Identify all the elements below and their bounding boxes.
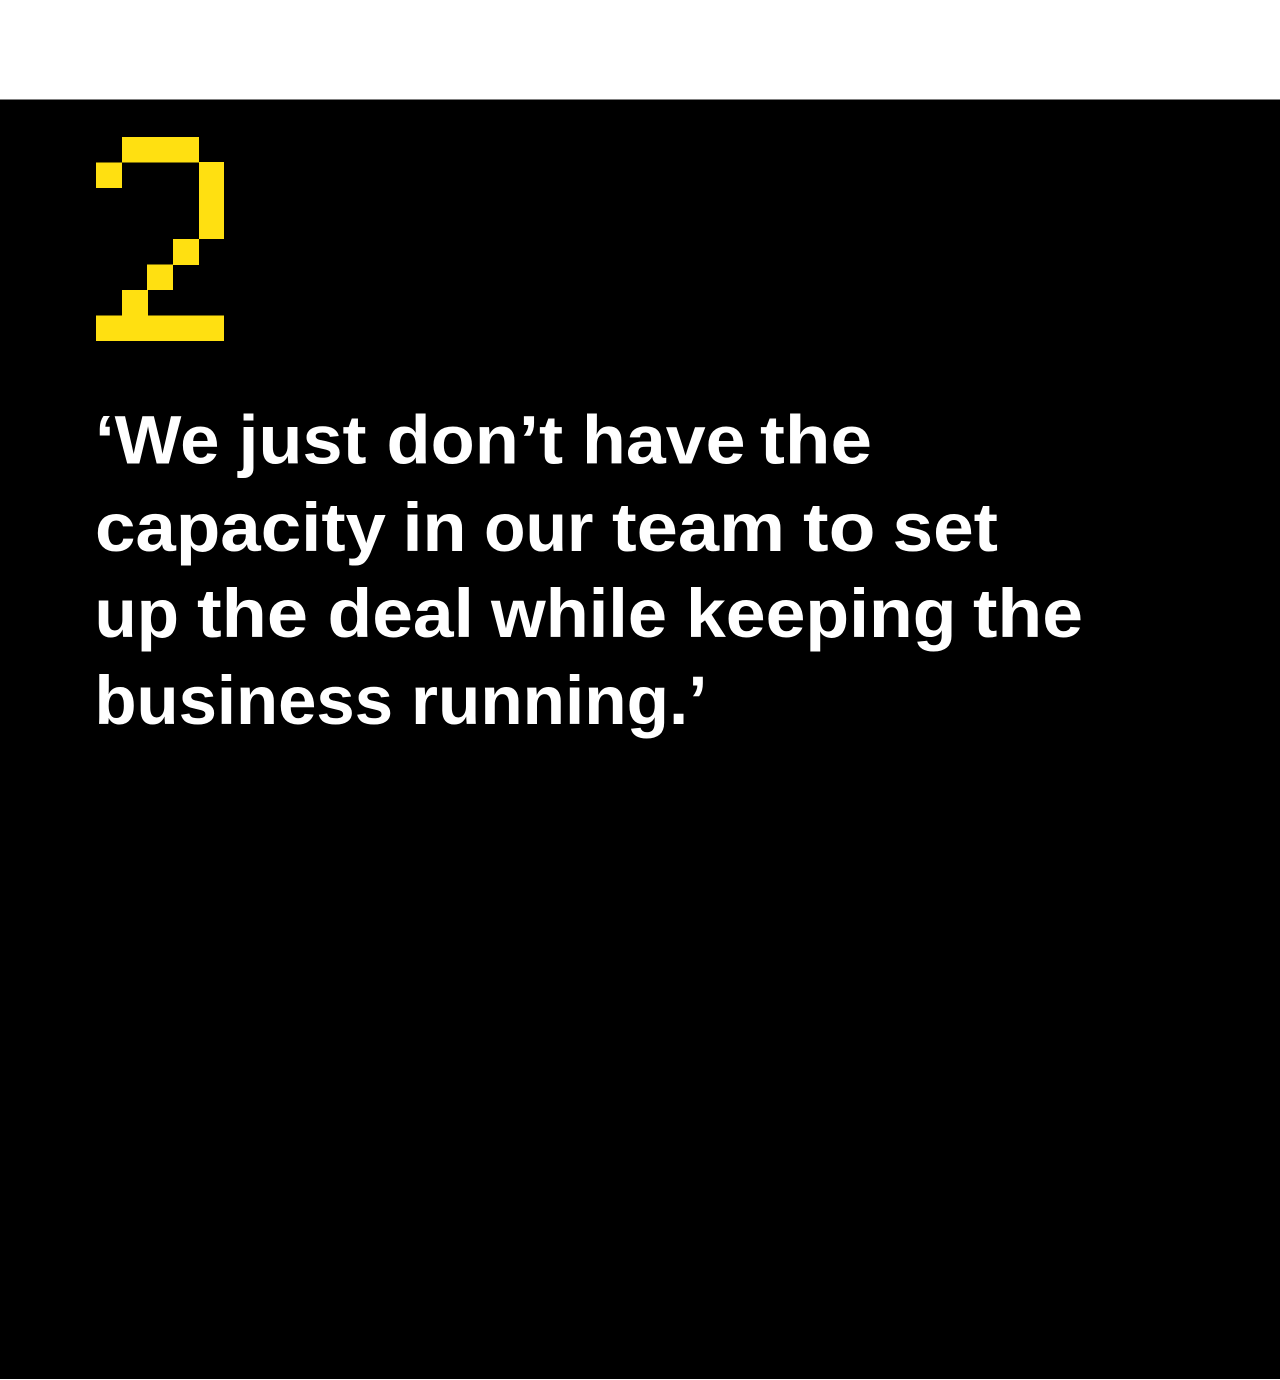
icon: pixel numeral 2 — [96, 137, 224, 341]
quote text: to — [803, 489, 876, 566]
quote text: don’t — [386, 402, 563, 478]
quote text: the — [760, 402, 872, 478]
quote text — [94, 402, 1083, 739]
quote text: team — [612, 489, 785, 566]
quote text: up — [94, 575, 179, 652]
quote text: just — [236, 402, 367, 478]
quote text: have — [582, 402, 746, 478]
quote text: deal — [328, 575, 474, 652]
quote text: the — [197, 575, 308, 652]
quote text: while — [490, 575, 667, 652]
quote text: capacity — [95, 489, 386, 566]
quote text: in — [402, 489, 466, 566]
quote text: the — [973, 575, 1083, 652]
quote text: our — [484, 489, 594, 566]
quote text: set — [892, 489, 998, 566]
quote text: keeping — [686, 575, 956, 652]
quote text: running.’ — [411, 662, 708, 739]
quote text: business — [94, 662, 393, 739]
quote text: ‘We — [95, 402, 220, 478]
